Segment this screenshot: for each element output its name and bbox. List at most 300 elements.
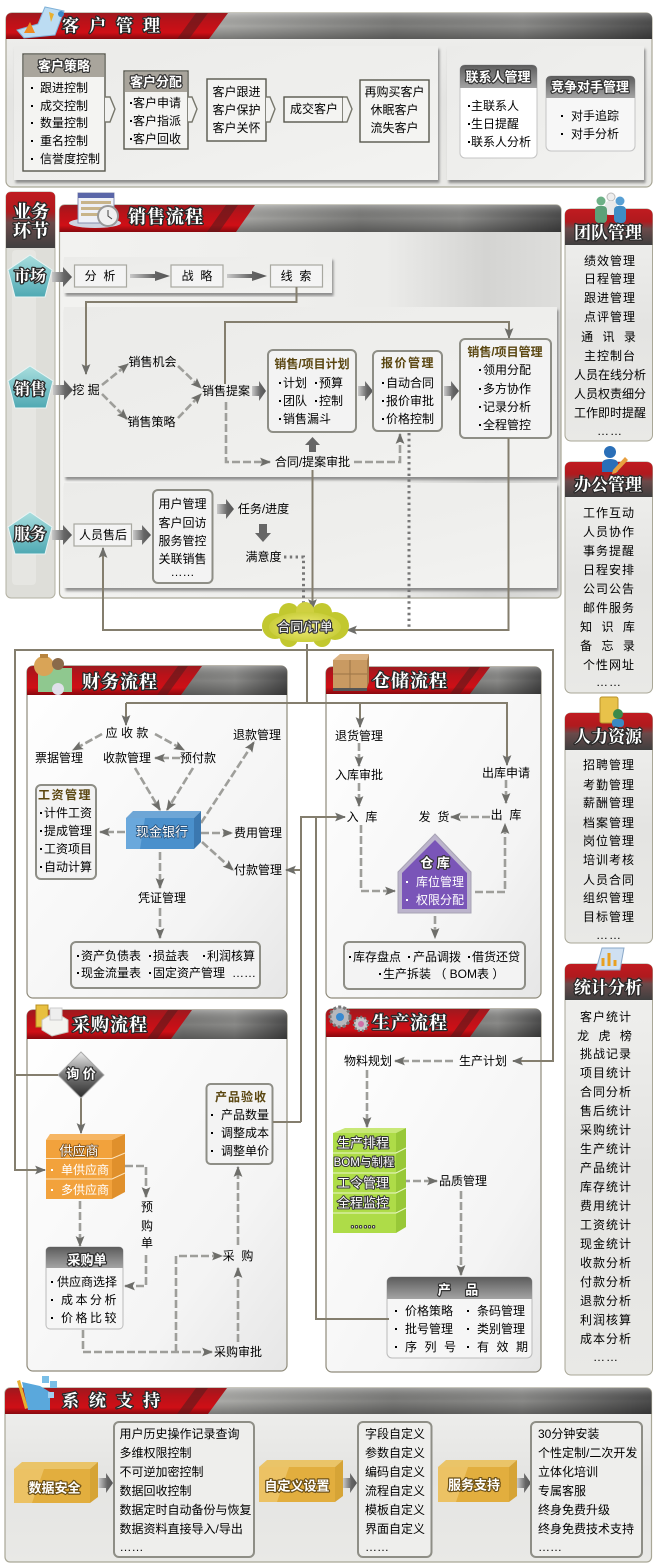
node: 市场 [8,255,52,297]
cube: 服务支持 [438,1460,517,1502]
box: 数据安全项目: 数据定时自动备份与恢复 [120,1502,252,1517]
box: 服务项目: 终身免费升级 [538,1502,610,1517]
box: 工资管理: 工资管理 [38,787,92,802]
inner panel: 联系人与竞争对手 [447,46,644,180]
panel: 系统支持 [5,1376,652,1562]
text: 物料规划: 物料规划 [344,1053,392,1068]
text: 采购: 采 购 [223,1248,253,1263]
box: 客户分配: 客户分配 [130,74,182,90]
text: 入库: 入 库 [347,809,377,824]
list: 统计分析: 售后统计 [580,1103,632,1118]
connector: outer loop [15,650,553,1319]
connector: 合同 to 人员售后 [103,548,262,630]
sidebar: 人力资源 [565,697,652,943]
box: 数据安全项目: 数据回收控制 [120,1483,192,1498]
box: 竞争对手管理 [546,76,635,151]
list: 办公管理: 邮件服务 [583,600,635,615]
sub-panel: 市场 [64,257,332,293]
list: 统计分析: 工资统计 [580,1218,632,1232]
house: 仓库: 仓 库 [420,856,450,870]
box: 报价管理: 价格控制 [386,411,434,426]
box: 用户管理: 用户管理 [158,496,207,511]
box: 报表: 资产负债表 [81,949,141,963]
box: 报表 [71,942,260,988]
arrows: 挖掘 diamond [102,364,201,419]
icon: gears [330,1007,368,1031]
text: 付款管理: 付款管理 [234,862,282,877]
icon: folder [600,697,624,727]
list: 统计分析: 收款分析 [580,1256,632,1270]
box: 客户跟进: 客户跟进 [212,84,261,99]
text: 品质管理: 品质管理 [439,1173,487,1188]
box: 成交客户: 成交客户 [290,101,338,116]
connector: 合同审批 [226,402,400,462]
box: 产品验收: 调整单价 [221,1143,269,1158]
list: 办公管理: 个性网址 [583,658,635,672]
text: 退货管理: 退货管理 [335,728,383,743]
stack: 生产排程 [333,1128,406,1233]
panel: 客户管理 [6,7,652,187]
box: 报表: …… [232,966,256,980]
icon: chart [596,948,624,970]
box: 产品验收 [206,1084,272,1164]
box: 客户策略 [23,54,105,171]
list: 团队管理: 人员权责细分 [574,387,646,401]
text: 退款管理: 退款管理 [233,727,281,742]
inner panel: 客户流程 [14,46,438,180]
box: 销售/项目计划: 控制 [319,394,343,408]
node: 服务: 服务 [14,524,46,544]
box: 用户管理: 服务管控 [158,533,207,548]
list: 办公管理: 人员协作 [583,524,635,539]
house: 仓库: 权限分配 [416,893,464,907]
list: 统计分析: 生产统计 [580,1142,632,1156]
text: 出库申请: 出库申请 [482,765,530,780]
list: 团队管理: 通 讯 录 [581,330,639,344]
list: 办公管理: 事务提醒 [583,543,635,558]
box: 产品: 有效期 [477,1339,536,1354]
box: 联系人管理: 生日提醒 [471,116,519,131]
connector: 提案 to 项目管理 [225,322,509,384]
box: 用户管理: 客户回访 [158,515,207,530]
text: 预购单: 购 [141,1218,153,1233]
text: 采购审批: 采购审批 [214,1344,262,1359]
list: 统计分析: 项目统计 [580,1066,632,1080]
arrows: purchase flow [80,1166,238,1352]
box: 联系人管理: 联系人分析 [471,135,531,149]
box: 联系人管理 [460,65,537,158]
cube: 供应商: 供应商 [59,1144,99,1158]
stack: 生产排程: 全程监控 [337,1196,389,1210]
list: 办公管理: 工作互动 [583,506,635,520]
arrow [188,97,197,122]
box: 报表: 现金流量表 [81,965,141,980]
box: 数据安全项目: 用户历史操作记录查询 [120,1426,240,1441]
sub-panel: 销售 [64,307,557,477]
panel: 仓储流程 [326,654,541,998]
text: 挖掘: 挖 掘 [72,382,100,397]
block arrow up [305,437,320,452]
box: 采购单 [46,1247,123,1329]
block arrow: 销售 [53,380,73,400]
text: 预购单 [141,1200,153,1250]
box: 产品验收: 调整成本 [221,1125,269,1140]
box: 报表: 损益表 [153,949,189,963]
list: 人力资源 [583,757,635,942]
cloud: 合同/订单: 合同/订单 [277,620,333,634]
box: 客户策略: 成交控制 [40,98,88,113]
box: 产品 [387,1277,536,1358]
cloud: 合同/订单 [262,602,349,647]
box: 销售/项目计划: 团队 [283,393,307,408]
arrow [105,97,115,122]
icon: money [34,654,72,695]
box: 库存 [344,942,525,989]
arrows: finance flow [73,734,254,938]
header: 采购流程 [27,1005,287,1039]
arrows: warehouse flow [359,743,506,938]
box: 库存: 库存盘点 [353,949,401,964]
text: 任务/进度: 任务/进度 [238,501,289,516]
box: 数据安全项目: 不可逆加密控制 [120,1464,204,1479]
cube: 供应商: 单供应商 [61,1162,109,1177]
box: 销售/项目管理: 销售/项目管理 [467,344,543,359]
icon: cartons [333,654,369,691]
box: 库存: 产品调拨 [413,950,461,964]
text: 入库审批: 入库审批 [335,767,383,782]
cube: 数据安全: 数据安全 [28,1480,81,1496]
list: 人力资源: 组织管理 [583,890,635,905]
box: 库存: 生产拆装 （ BOM表 ） [383,966,504,981]
list: 人力资源: …… [596,928,622,942]
list: 办公管理: 日程安排 [583,562,635,577]
box: 销售/项目计划: 预算 [319,375,343,390]
box: 竞争对手管理: 对手追踪 [571,108,619,123]
box: 工资管理: 自动计算 [44,859,92,874]
text: 合同/提案审批: 合同/提案审批 [275,454,350,469]
list: 统计分析: 合同分析 [580,1084,632,1099]
cube: 供应商 [46,1134,125,1199]
box: 销售/项目管理 [460,339,551,438]
connector: 项目管理 to 合同 [347,438,508,630]
box: 再购买客户: 休眠客户 [370,102,419,117]
box: 产品验收: 产品验收 [215,1089,267,1104]
heading: 仓储流程: 仓储流程 [372,670,448,691]
connector: dotted 满意度 to 合同 [284,557,304,609]
text: 生产计划: 生产计划 [459,1054,507,1068]
box: 销售/项目计划 [268,350,356,432]
list: 办公管理: 备 忘 录 [580,638,638,653]
header: 财务流程 [27,654,287,695]
cube: 自定义设置 [259,1460,343,1502]
box: 自定义项目: 模板自定义 [365,1502,425,1517]
stack: 生产排程: 工令管理 [337,1176,389,1190]
panel: 销售流程 [60,193,561,598]
box: 客户分配: 客户申请 [133,95,181,110]
box: 采购单: 供应商选择 [57,1274,117,1289]
list: 办公管理: 知 识 库 [580,619,638,634]
text: 应收款: 应 收 款 [106,725,148,740]
block arrow [444,381,459,401]
heading: 统计分析: 统计分析 [574,978,642,998]
list: 团队管理: 工作即时提醒 [574,405,646,420]
box: 服务项目 [531,1422,642,1557]
list: 人力资源: 考勤管理 [583,777,635,792]
box: 销售/项目计划: 计划 [283,376,307,390]
diamond: 询价 [58,1052,104,1098]
stack: 生产排程: BOM与制程 [334,1156,395,1169]
box: 销售/项目计划: 销售/项目计划 [274,356,350,371]
header: 销售流程 [60,193,561,232]
text: 销售提案: 销售提案 [202,383,250,398]
box: 线索 [270,265,322,287]
box: 人员售后: 人员售后 [79,527,127,542]
box: 自定义项目: 编码自定义 [365,1464,425,1479]
box: 服务项目: …… [538,1540,562,1554]
list: 团队管理: 人员在线分析 [574,368,646,382]
connector: 合同 to lower flows [126,644,507,765]
box: 产品: 批号管理 [405,1321,453,1336]
block arrow [517,1473,531,1493]
heading: 客户管理: 客户管理 [62,16,170,36]
box: 报价管理: 报价审批 [386,393,434,408]
list: 人力资源: 档案管理 [583,815,635,830]
box: 销售/项目管理: 多方协作 [483,381,531,396]
text: 预付款: 预付款 [180,751,216,765]
box: 报价管理: 报价管理 [381,355,435,370]
header: 系统支持 [5,1376,652,1414]
cube: 现金银行 [126,811,201,849]
stack: 生产排程: …… [350,1216,376,1230]
list: 团队管理 [574,253,646,438]
box: 成交客户 [284,97,343,122]
box: 竞争对手管理: 竞争对手管理 [551,80,629,94]
box: 自定义项目: 流程自定义 [365,1483,425,1498]
box: 销售/项目管理: 全程管控 [483,417,531,432]
heading: 系统支持: 系统支持 [62,1390,170,1410]
box: 产品: 序列号 [405,1339,464,1354]
sub-panel: 服务 [64,483,557,588]
box: 自定义项目: 字段自定义 [365,1426,425,1441]
box: 数据安全项目 [114,1422,254,1557]
list: 统计分析: 采购统计 [580,1122,632,1137]
connector: dotted 报价 to 合同 [408,433,410,628]
box: 客户跟进: 客户保护 [212,102,261,117]
node: 销售: 销售 [14,380,46,398]
box: 采购单: 价格比较 [61,1310,119,1325]
list: 统计分析: 现金统计 [580,1236,632,1251]
list: 团队管理: 跟进管理 [584,290,636,305]
box: 报价管理 [373,351,442,431]
arrow [343,97,352,122]
list: 统计分析: 龙 虎 榜 [577,1028,635,1043]
text: 发货: 发 货 [419,809,449,824]
box: 再购买客户: 流失客户 [370,120,419,135]
list: 统计分析: 库存统计 [580,1179,632,1194]
box: 客户分配 [124,71,188,149]
connector: 线索 to 挖掘 [86,287,296,374]
box: 数据安全项目: 数据资料直接导入/导出 [120,1521,243,1536]
icon: map [17,7,64,38]
box: 客户跟进: 客户关怀 [212,120,261,135]
box: 服务项目: 立体化培训 [538,1464,598,1479]
heading: 业务环节: 业务 [13,202,49,222]
panel: 财务流程 [27,654,287,998]
list: 办公管理: …… [596,675,622,689]
box: 销售/项目管理: 记录分析 [483,400,531,414]
list: 人力资源: 薪酬管理 [583,795,635,810]
box: 用户管理: …… [170,565,194,579]
box: 分析 [74,265,126,287]
text: 满意度: 满意度 [245,549,282,564]
sidebar: 统计分析 [565,948,652,1375]
block arrow [217,499,234,519]
connector: 询价 to 供应商 [80,1098,82,1133]
box: 再购买客户 [360,80,429,142]
box: 销售/项目计划: 销售漏斗 [283,411,331,426]
box: 分析: 分 析 [85,269,115,283]
heading: 人力资源: 人力资源 [574,728,643,746]
box: 自定义项目: 界面自定义 [365,1521,425,1536]
heading: 生产流程: 生产流程 [372,1012,448,1033]
list: 人力资源: 人员合同 [583,872,635,887]
box: 报价管理: 自动合同 [386,375,434,390]
heading: 销售流程: 销售流程 [128,206,204,227]
diamond: 询价: 询 价 [66,1066,96,1082]
column: 业务环节 [6,192,55,598]
box: 服务项目: 终身免费技术支持 [538,1521,634,1536]
block arrow [358,381,373,401]
box: 工资管理: 提成管理 [44,823,92,838]
box: 战略 [171,265,223,287]
box: 产品验收: 产品数量 [221,1107,269,1122]
cube: 供应商: 多供应商 [61,1182,109,1197]
block arrow [252,381,266,401]
list: 统计分析: 费用统计 [580,1199,632,1213]
text: 预购单: 预 [141,1200,153,1214]
panel: 生产流程 [326,1007,541,1372]
box: 报表: 固定资产管理 [153,965,225,980]
list: 办公管理: 公司公告 [583,582,635,596]
icon: calendar and clock [69,193,121,228]
text: 票据管理: 票据管理 [35,750,83,765]
list: 人力资源: 招聘管理 [583,757,635,772]
box: 人员售后 [74,524,132,546]
heading: 财务流程: 财务流程 [82,671,158,692]
list: 人力资源: 培训考核 [583,852,635,867]
box: 客户策略: 客户策略 [38,58,90,74]
box: 产品: 条码管理 [477,1303,525,1318]
list: 团队管理: …… [597,424,623,438]
arrow [130,271,170,281]
list: 统计分析: 成本分析 [580,1332,632,1346]
heading: 团队管理: 团队管理 [574,222,642,242]
box: 客户分配: 客户指派 [133,113,181,128]
list: 统计分析: …… [593,1350,619,1364]
list: 团队管理: 绩效管理 [584,253,636,268]
box: 线索: 线 索 [281,269,311,283]
list: 统计分析: 挑战记录 [580,1047,632,1061]
box: 客户分配: 客户回收 [133,131,181,146]
list: 团队管理: 主控制台 [584,348,636,363]
list: 统计分析: 客户统计 [580,1009,632,1024]
box: 产品: 产 品 [438,1282,478,1298]
box: 联系人管理: 主联系人 [471,99,519,113]
heading: 业务环节: 环节 [13,220,49,241]
header: 生产流程 [326,1007,541,1037]
block arrow [133,525,151,545]
block arrow [98,1473,113,1493]
node: 销售 [8,366,53,408]
list: 统计分析: 产品统计 [580,1161,632,1175]
box: 客户策略: 重名控制 [40,133,88,148]
icon: shopping [36,1005,68,1036]
box: 客户策略: 信誉度控制 [40,151,100,166]
stack: 生产排程: 生产排程 [337,1136,389,1150]
text: 费用管理: 费用管理 [234,825,282,840]
node: 服务 [8,512,52,554]
arrow [227,271,267,281]
cube: 自定义设置: 自定义设置 [264,1478,330,1494]
box: 产品: 类别管理 [477,1321,525,1336]
box: 采购单: 采购单 [67,1252,107,1268]
box: 自定义项目: 参数自定义 [365,1445,425,1460]
list: 统计分析: 付款分析 [580,1275,632,1289]
box: 销售/项目管理: 领用分配 [483,363,531,377]
box: 库存: 借货还贷 [472,949,520,964]
box: 用户管理: 关联销售 [158,551,207,566]
heading: 业务环节 [13,202,49,241]
list: 人力资源: 岗位管理 [583,833,635,848]
sidebar: 办公管理 [565,446,652,693]
arrows: production flow [367,1061,461,1275]
box: 工资管理: 工资项目 [44,842,92,856]
icon: person and pencil [602,446,628,474]
header: 客户管理 [6,7,652,39]
box: 服务项目: 个性定制/二次开发 [538,1445,637,1460]
house: 仓库: 库位管理 [416,874,464,889]
list: 统计分析: 退款分析 [580,1294,632,1308]
box: 工资管理 [36,785,96,879]
header: 仓储流程 [326,654,541,694]
box: 客户策略: 数量控制 [40,115,88,130]
text: 凭证管理: 凭证管理 [138,890,186,905]
box: 联系人管理: 联系人管理 [465,70,531,84]
box: 数据安全项目: 多维权限控制 [120,1446,192,1460]
box: 数据安全项目: …… [120,1540,144,1554]
box: 客户策略: 跟进控制 [40,81,88,95]
box: 客户跟进 [207,79,266,141]
box: 报表: 利润核算 [207,948,255,963]
cube: 数据安全 [14,1462,98,1503]
heading: 办公管理: 办公管理 [574,474,642,494]
box: 服务项目: 30分钟安装 [538,1426,599,1441]
text: 出库: 出 库 [491,807,521,822]
panel: 采购流程 [27,1005,287,1371]
text: 销售机会: 销售机会 [128,354,177,369]
box: 采购单: 成本分析 [61,1293,119,1307]
text: 收款管理: 收款管理 [103,750,151,765]
cube: 服务支持: 服务支持 [448,1478,500,1492]
list: 办公管理 [580,506,638,689]
box: 用户管理 [153,490,212,583]
list: 团队管理: 点评管理 [584,309,636,324]
icon: people [595,193,626,223]
box: 产品: 价格策略 [405,1303,453,1318]
heading: 采购流程: 采购流程 [72,1014,148,1035]
block arrow: 服务 [52,525,72,545]
list: 统计分析 [577,1009,635,1364]
